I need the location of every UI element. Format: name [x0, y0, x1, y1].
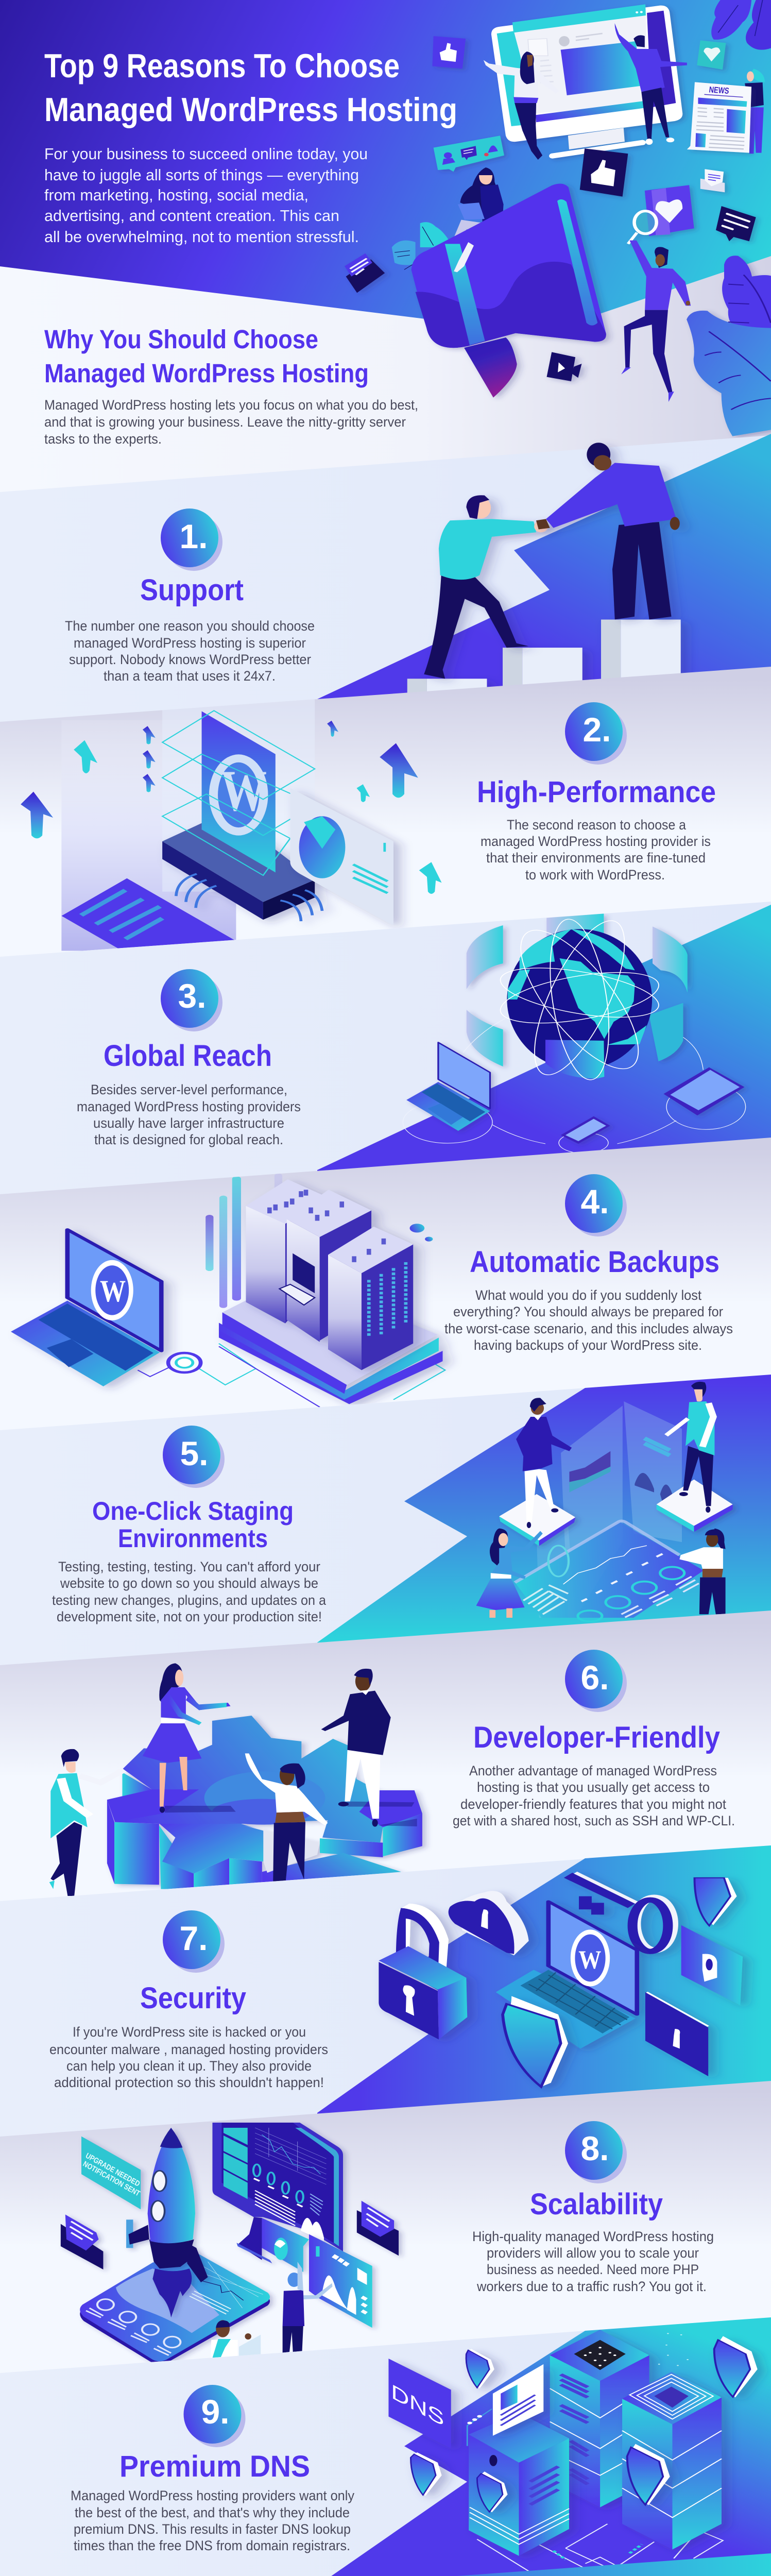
icon: tablet — [664, 1067, 744, 1115]
icon: WordPress card — [202, 711, 276, 872]
icon: person holding newspaper — [745, 69, 765, 154]
icon: globe — [493, 914, 665, 1082]
shadow bars — [165, 1802, 417, 1826]
icon: second leaf — [392, 241, 416, 269]
description — [49, 2024, 328, 2090]
icon: server middle — [550, 2330, 649, 2507]
number badge 8 — [565, 2121, 627, 2183]
illustration: hero lower scene — [345, 184, 771, 436]
text block: reason 4 — [444, 1174, 733, 1353]
number badge 3 — [161, 969, 222, 1031]
icon: steps — [407, 620, 681, 702]
icon: seated woman legs — [454, 242, 474, 272]
icon: person on right platform — [666, 1382, 714, 1513]
heading: Automatic Backups — [470, 1245, 719, 1279]
description — [77, 1082, 301, 1147]
number badge 9: 9. — [201, 2393, 230, 2431]
number badge 2 — [565, 702, 627, 765]
panel: reason 8 scalability — [0, 2081, 771, 2421]
tag text: NOTIFICATION SENT — [81, 2160, 142, 2198]
description: Testing, testing, testing. You can't afford your — [58, 1559, 320, 1574]
icon: seated woman with laptop — [452, 167, 504, 247]
icon: woman in purple dress — [143, 1663, 231, 1813]
heading: High-Performance — [477, 775, 716, 809]
panel: reason 5 staging environments — [0, 1375, 771, 1710]
icon: woman at monitor — [484, 52, 559, 160]
description — [52, 1559, 327, 1624]
background wedge — [317, 434, 771, 721]
description: What would you do if you suddenly lost — [475, 1287, 701, 1303]
description: business as needed. Need more PHP — [487, 2262, 699, 2277]
heading: Scalability — [530, 2188, 663, 2221]
description: than a team that uses it 24x7. — [104, 668, 276, 684]
panel: reason 2 high-performance — [0, 667, 771, 957]
description — [65, 618, 315, 684]
description: the worst-case scenario, and this includes always — [444, 1321, 733, 1336]
panel: reason 4 automatic backups — [0, 1138, 771, 1473]
description: If you're WordPress site is hacked or you — [73, 2024, 306, 2040]
globe backing bands — [467, 913, 688, 1066]
number badge 7: 7. — [179, 1919, 208, 1957]
description: Another advantage of managed WordPress — [469, 1763, 717, 1778]
icon: heart card teal — [697, 40, 726, 70]
icon: document card — [493, 2364, 543, 2436]
news label: NEWS — [709, 85, 730, 96]
icon: chat bubble navy — [716, 206, 756, 241]
icon: launch tablet — [80, 2251, 270, 2365]
icon: circuit lines — [477, 2524, 723, 2571]
icon: thumb up card navy — [580, 148, 628, 197]
number badge 2: 2. — [582, 710, 611, 749]
illustration: handshake on steps — [407, 443, 681, 702]
text block: reason 2 — [477, 702, 716, 883]
description: High-quality managed WordPress hosting — [472, 2229, 714, 2244]
icon: key — [568, 1873, 673, 1952]
icon: dots — [410, 1224, 433, 1242]
illustration: team with staging dashboard — [476, 1382, 733, 1621]
icon: dashboard panel — [515, 1521, 704, 1621]
icon: mail small — [700, 169, 725, 192]
icon: woman in blue dress — [476, 1529, 543, 1618]
text block: reason 3 — [77, 969, 301, 1147]
text block: reason 1 — [65, 509, 315, 684]
icon: laptop: W — [578, 1946, 601, 1975]
heading: Developer-Friendly — [473, 1721, 720, 1754]
description: Managed WordPress hosting providers want only — [71, 2488, 354, 2503]
icon: chart card — [290, 788, 393, 926]
icon: leaves top right — [711, 0, 771, 50]
description: the best of the best, and that's why they include — [75, 2505, 350, 2520]
description — [444, 1287, 733, 1353]
panel: reason 6 developer-friendly — [0, 1611, 771, 1947]
icon: woman in white shirt — [245, 1753, 328, 1882]
icon: envelopes — [61, 2201, 399, 2269]
background wedge — [317, 1845, 771, 2128]
icon: rocket — [126, 2128, 208, 2317]
icon: gears — [107, 1716, 422, 1889]
number badge 5: 5. — [180, 1434, 209, 1472]
icon: server dots — [467, 2415, 482, 2424]
icon: folder — [681, 1925, 743, 2005]
title — [44, 47, 457, 128]
text block: intro — [44, 145, 368, 246]
icon: DNS card — [388, 2359, 451, 2449]
icon: platforms — [499, 1480, 733, 1546]
description: workers due to a traffic rush? You got it. — [476, 2279, 707, 2294]
icon: man in navy sweater — [321, 1669, 391, 1827]
icon: man in purple — [536, 443, 680, 620]
panel: reason 1 support — [0, 434, 771, 773]
icon: monitor — [491, 4, 682, 156]
description: The second reason to choose a — [507, 817, 687, 833]
icon: keyboard plate — [61, 878, 235, 948]
description: testing new changes, plugins, and updates on a — [52, 1592, 327, 1608]
description: usually have larger infrastructure — [93, 1115, 284, 1131]
description: that their environments are fine-tuned — [486, 850, 706, 866]
icon: laptop with WordPress logo — [11, 1230, 161, 1386]
description — [472, 2229, 714, 2294]
number badge 5 — [163, 1426, 225, 1488]
icon: shield — [503, 1996, 568, 2087]
icon: padlock — [379, 1904, 467, 2040]
title: Top 9 Reasons To Choose — [44, 47, 400, 84]
heading: Support — [140, 573, 244, 607]
icon: server towers — [246, 1179, 413, 1370]
icon: heart card with magnifier — [628, 185, 694, 244]
description: development site, not on your production site! — [57, 1609, 322, 1624]
text block: intro: all be overwhelming, not to mention stressful. — [44, 228, 359, 246]
description: website to go down so you should always be — [60, 1575, 318, 1591]
heading: why you should choose — [44, 325, 369, 388]
description — [453, 1763, 735, 1828]
icon: thumb up card purple — [432, 36, 466, 69]
text block: reason 7 — [49, 1910, 328, 2090]
background wedge — [317, 2317, 771, 2576]
description: encounter malware , managed hosting providers — [49, 2042, 328, 2057]
text block: why description: Managed WordPress hosting lets you focus on what you do best, — [44, 397, 418, 413]
icon: side panels — [262, 2218, 372, 2328]
number badge 7 — [163, 1910, 225, 1973]
description: that is designed for global reach. — [94, 1132, 283, 1147]
text block: intro: have to juggle all sorts of things — everything — [44, 166, 359, 184]
icon: man on left platform — [516, 1398, 572, 1528]
number badge 3: 3. — [178, 977, 207, 1015]
icon: social bubble — [434, 135, 504, 172]
panel: why managed hosting background — [0, 256, 771, 515]
icon: man with teal vest — [49, 1749, 124, 1896]
light bars — [205, 1174, 282, 1308]
number badge 6 — [565, 1650, 627, 1712]
icon: ring node — [168, 1353, 201, 1372]
text block: intro: For your business to succeed online today, you — [44, 145, 368, 163]
number badge 1 — [161, 509, 222, 571]
icon: floating charts — [569, 1438, 674, 1503]
icon: arrows — [21, 721, 442, 894]
icon: server chip — [162, 812, 322, 921]
illustration: globe with devices — [403, 913, 746, 1153]
icon: video camera navy — [546, 352, 582, 381]
number badge 1: 1. — [179, 517, 208, 555]
description: to work with WordPress. — [525, 867, 665, 883]
connection circles — [403, 1019, 746, 1153]
description: developer-friendly features that you might not — [460, 1797, 726, 1812]
panel: hero background — [0, 0, 771, 361]
icon: envelope navy — [345, 253, 385, 293]
text block: why description — [44, 397, 418, 447]
tag text: UPGRADE NEEDED — [84, 2151, 142, 2189]
icon: teal leaf — [420, 222, 449, 247]
text block: reason 9 — [71, 2385, 354, 2553]
illustration: WordPress chip with arrows — [21, 697, 442, 951]
illustration: security icons with laptop — [379, 1873, 743, 2087]
icon: megaphone — [411, 184, 606, 398]
description: times than the free DNS from domain registrars. — [74, 2538, 350, 2553]
icon: leaves bottom right — [687, 256, 771, 436]
light beams — [537, 1401, 682, 1618]
number badge 4: 4. — [580, 1182, 609, 1221]
icon: monitor dashboard — [212, 2123, 343, 2263]
icon: laptop — [496, 1902, 637, 2048]
description: Besides server-level performance, — [91, 1082, 287, 1097]
icon: woman in white shirt — [679, 1529, 726, 1614]
number badge 9 — [183, 2385, 245, 2447]
icon: newspaper — [687, 82, 751, 153]
icon: man in teal — [424, 495, 548, 679]
description: everything? You should always be prepared for — [453, 1304, 723, 1319]
description — [71, 2488, 354, 2553]
illustration: hero upper scene — [420, 0, 771, 247]
icon: shield top right — [694, 1878, 737, 1926]
illustration: rocket and dashboard — [61, 2123, 399, 2365]
panel: reason 9 premium DNS — [0, 2317, 771, 2576]
heading: Global Reach — [104, 1039, 272, 1073]
background wedge — [317, 1375, 771, 1659]
number badge 8: 8. — [580, 2129, 609, 2167]
globe base band — [545, 1040, 604, 1078]
illustration: servers and laptop — [11, 1174, 445, 1407]
icon: laptop with WordPress logo: W — [100, 1274, 126, 1309]
illustration: DNS servers — [388, 2330, 758, 2571]
icon: phone — [561, 1116, 610, 1144]
heading — [92, 1497, 294, 1553]
text block: reason 5 — [52, 1426, 327, 1624]
teal wire diamonds — [162, 710, 315, 875]
heading: Environments — [118, 1524, 268, 1553]
heading: why you should choose: Why You Should Choose — [44, 325, 318, 354]
icon: dark card — [645, 1992, 708, 2076]
description: hosting is that you usually get access to — [477, 1780, 710, 1795]
icon: circuit lines — [138, 1344, 445, 1407]
number badge 4 — [565, 1174, 627, 1236]
icon: server platform — [219, 1276, 443, 1404]
text block: why description: and that is growing your business. Leave the nitty-gritty server — [44, 414, 406, 430]
text block: reason 8 — [472, 2121, 714, 2294]
wordpress logo letter: W — [220, 759, 267, 823]
description: managed WordPress hosting provider is — [481, 834, 711, 849]
panel: reason 7 security — [0, 1845, 771, 2179]
number badge 6: 6. — [580, 1658, 609, 1697]
text block: intro: from marketing, hosting, social media, — [44, 186, 309, 204]
description: premium DNS. This results in faster DNS lookup — [74, 2521, 351, 2537]
description: get with a shared host, such as SSH and WP-CLI. — [453, 1813, 735, 1828]
description: providers will allow you to scale your — [487, 2245, 699, 2261]
icon: sparkles — [658, 2333, 689, 2366]
heading: Security — [140, 1981, 246, 2015]
icon: cloud with keyhole — [449, 1891, 529, 1955]
text block: why description: tasks to the experts. — [44, 431, 162, 447]
description — [481, 817, 711, 883]
icon: server right — [622, 2372, 722, 2549]
heading: why you should choose: Managed WordPress Hosting — [44, 359, 369, 388]
panel: reason 3 global reach — [0, 902, 771, 1171]
icon: jumping man — [621, 241, 691, 402]
description: managed WordPress hosting is superior — [74, 635, 306, 651]
icon: person with tablet — [211, 2320, 261, 2358]
description: managed WordPress hosting providers — [77, 1099, 301, 1114]
description: additional protection so this shouldn't happen! — [54, 2075, 324, 2090]
panel: footer — [0, 2553, 771, 2576]
text block: reason 6 — [453, 1650, 735, 1828]
text block: intro: advertising, and content creation. This can — [44, 207, 339, 225]
illustration: team on gears — [49, 1663, 422, 1896]
icon: man at monitor — [615, 23, 687, 145]
translucent panels — [61, 697, 315, 951]
icon: person viewing panel — [283, 2262, 333, 2353]
icon: tag notification — [81, 2137, 141, 2209]
heading: Premium DNS — [119, 2450, 310, 2483]
icon: DNS card: DNS — [391, 2379, 444, 2431]
icon: laptop — [406, 1042, 490, 1131]
icon: shields — [410, 2336, 758, 2513]
description: The number one reason you should choose — [65, 618, 315, 634]
description: can help you clean it up. They also provide — [66, 2058, 312, 2074]
background wedge — [317, 905, 771, 1185]
description: support. Nobody knows WordPress better — [69, 652, 311, 667]
description: having backups of your WordPress site. — [474, 1337, 702, 1353]
orbit lines — [493, 914, 665, 1082]
heading: One-Click Staging — [92, 1497, 294, 1526]
icon: server left — [467, 2409, 569, 2556]
title: Managed WordPress Hosting — [44, 91, 457, 128]
